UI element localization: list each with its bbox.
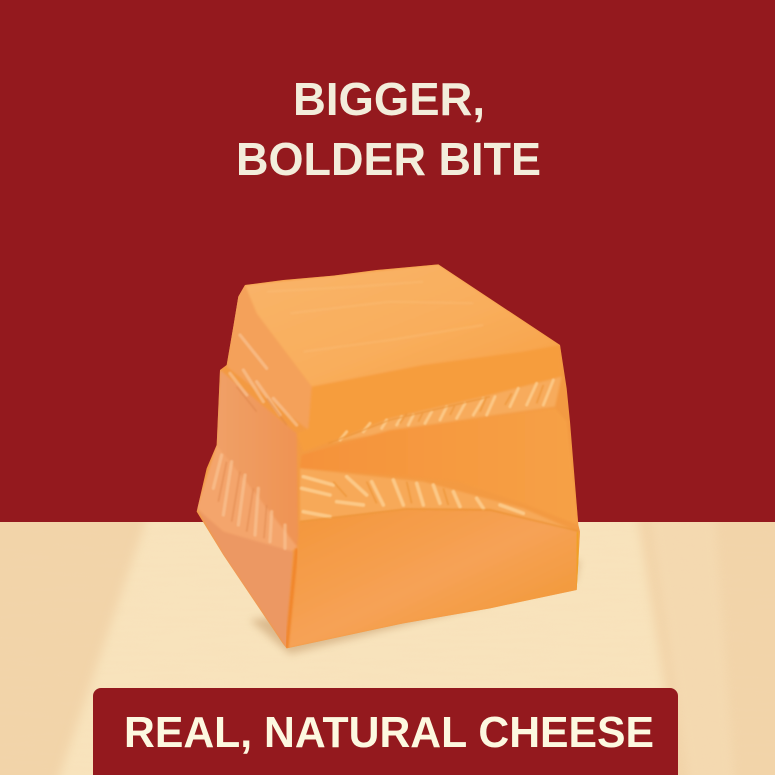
red background	[0, 0, 775, 522]
cheese silhouette	[197, 264, 580, 648]
cheese upper left face	[227, 285, 312, 430]
cheese left lower crumbled area	[197, 445, 298, 552]
cheese upper crumble	[328, 377, 562, 443]
lower crumble shadows	[300, 482, 578, 531]
cheese left middle band	[217, 370, 298, 548]
title: BIGGER,	[293, 73, 485, 125]
upper crumble streaks	[340, 380, 553, 440]
cheese front left edge highlight	[287, 548, 297, 648]
cheese upper front face	[560, 346, 561, 351]
cheese block illustration	[197, 264, 580, 648]
cheese lower crumble	[300, 468, 573, 530]
cheese lower front face	[287, 509, 580, 648]
left ledge crumble shadows	[218, 387, 287, 538]
banner	[93, 688, 678, 775]
cheese shadow on table	[250, 560, 580, 654]
upper crumble shadows	[328, 385, 543, 443]
title	[236, 73, 541, 185]
cheese right edge highlight	[577, 532, 578, 590]
banner: REAL, NATURAL CHEESE	[124, 708, 654, 757]
cheese top face	[245, 264, 560, 387]
left ledge crumble streaks	[213, 335, 297, 548]
wood table surface	[0, 515, 775, 775]
title: BOLDER BITE	[236, 133, 541, 185]
cheese middle band	[304, 428, 578, 524]
cheese left bottom face	[197, 508, 293, 648]
cheese top face grain	[382, 325, 482, 342]
lower crumble streaks	[302, 477, 523, 517]
